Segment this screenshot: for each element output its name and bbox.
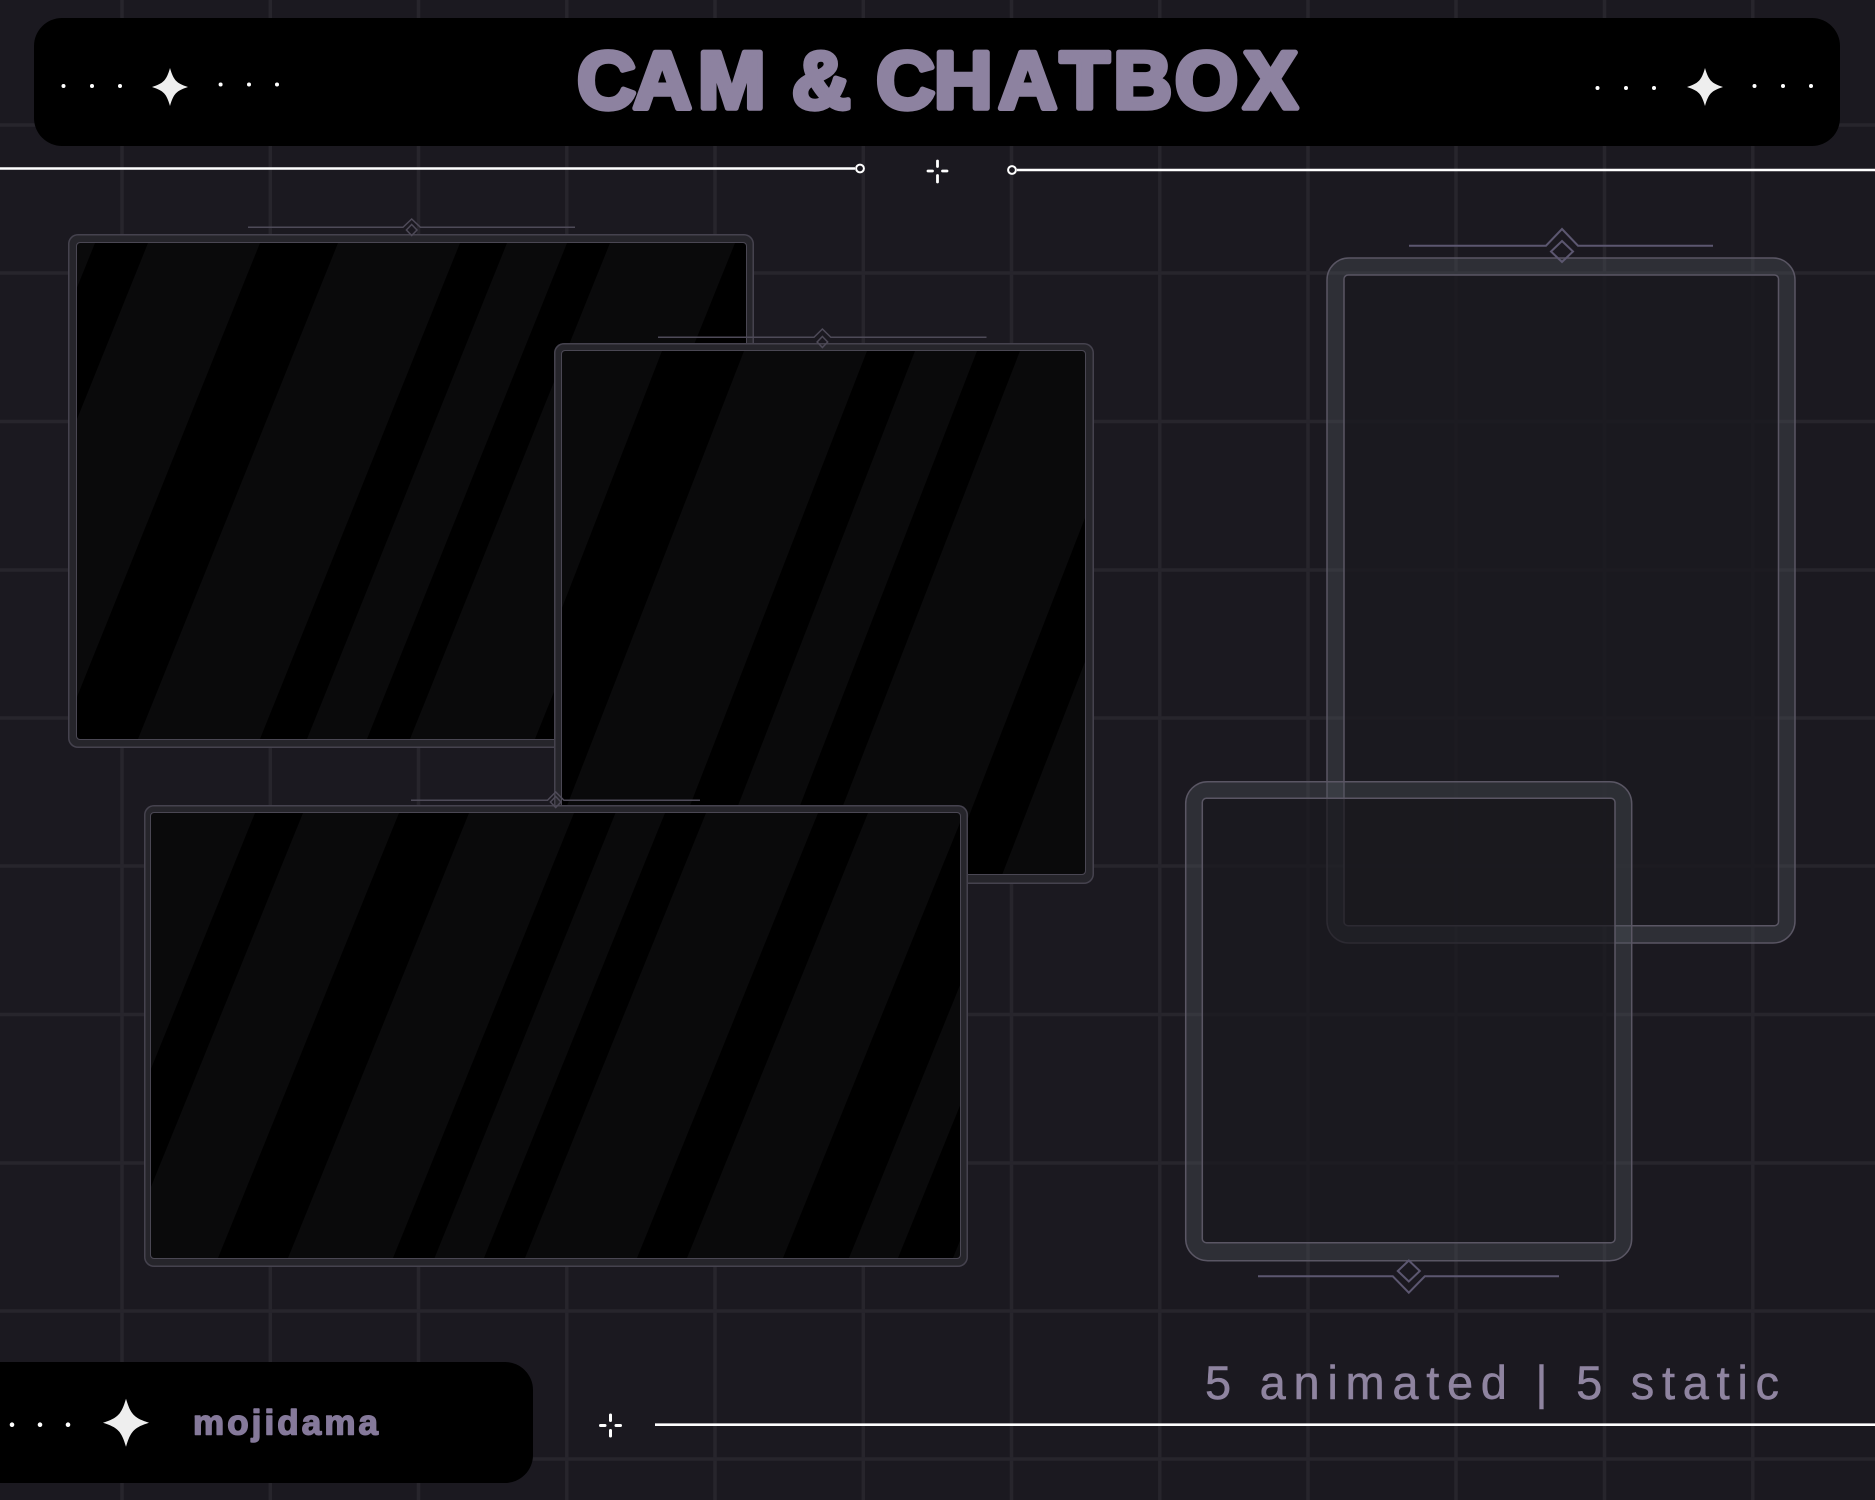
striped screen 3	[151, 813, 960, 1258]
icon: left sparkle with dots	[62, 68, 279, 106]
panel: chat frame tall	[1326, 257, 1796, 944]
icon: top crosshair sparkle	[926, 160, 948, 184]
icon: right sparkle with dots	[1596, 68, 1813, 106]
ornament: frame 3 diamond	[411, 791, 700, 808]
striped screen 2	[562, 351, 1085, 874]
top divider left with end circle	[0, 164, 865, 174]
caption: animated and static count: 5 animated | 5 static	[1205, 1356, 1779, 1409]
panel: cam frame 2	[554, 343, 1094, 884]
header bar	[34, 18, 1840, 146]
panel: cam frame 1	[68, 234, 754, 748]
ornament: square frame diamond	[1258, 1259, 1559, 1294]
striped screen 1	[77, 243, 746, 739]
bottom divider	[655, 1423, 1875, 1426]
ornament: frame 1 diamond	[248, 218, 575, 236]
brand name: mojidama	[193, 1403, 379, 1442]
footer brand bar	[0, 1362, 533, 1483]
icon: footer sparkle with dots	[10, 1398, 149, 1447]
icon: bottom crosshair sparkle	[599, 1414, 622, 1438]
top divider right with end circle	[1007, 165, 1875, 175]
panel: cam frame 3	[144, 805, 968, 1267]
ornament: tall frame diamond	[1409, 228, 1713, 264]
panel: chat frame square	[1185, 781, 1632, 1262]
ornament: frame 2 diamond	[658, 328, 986, 348]
